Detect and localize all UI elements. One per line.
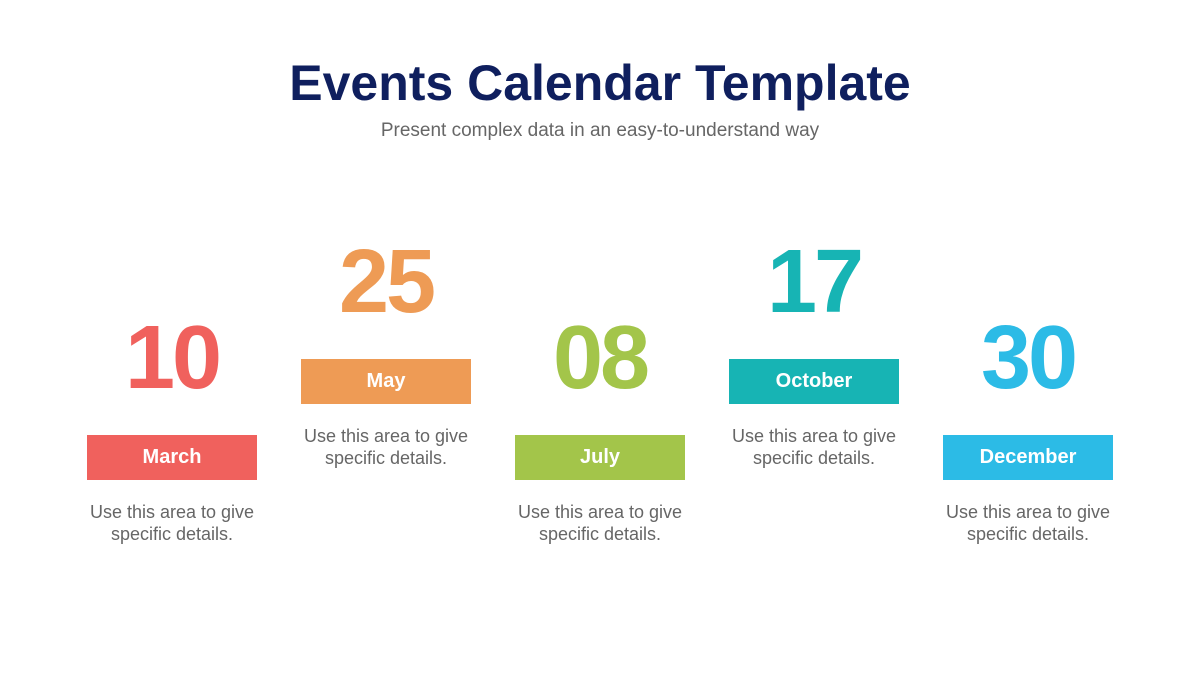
- column: March: [87, 308, 257, 544]
- number 17: 17: [767, 232, 861, 332]
- label October: [729, 359, 899, 404]
- label December: December: [980, 446, 1076, 468]
- details text: Use this area to give specific details.: [304, 426, 468, 468]
- details text: Use this area to give specific details.: [90, 502, 254, 544]
- label March: March: [143, 446, 201, 468]
- label May: [301, 359, 471, 404]
- title: Events Calendar Template: [289, 55, 911, 111]
- label March: [87, 435, 257, 480]
- label July: [515, 435, 685, 480]
- label May: May: [367, 370, 405, 392]
- number 08: 08: [553, 308, 647, 408]
- column: October: [729, 232, 899, 468]
- label October: October: [776, 370, 852, 392]
- details text: Use this area to give specific details.: [518, 502, 682, 544]
- column: July: [515, 308, 685, 544]
- label December: [943, 435, 1113, 480]
- details text: Use this area to give specific details.: [946, 502, 1110, 544]
- number 30: 30: [981, 308, 1075, 408]
- subtitle: Present complex data in an easy-to-understand way: [381, 120, 819, 141]
- column: May: [301, 232, 471, 468]
- number 25: 25: [339, 232, 433, 332]
- number 10: 10: [125, 308, 219, 408]
- column: December: [943, 308, 1113, 544]
- label July: July: [580, 446, 620, 468]
- details text: Use this area to give specific details.: [732, 426, 896, 468]
